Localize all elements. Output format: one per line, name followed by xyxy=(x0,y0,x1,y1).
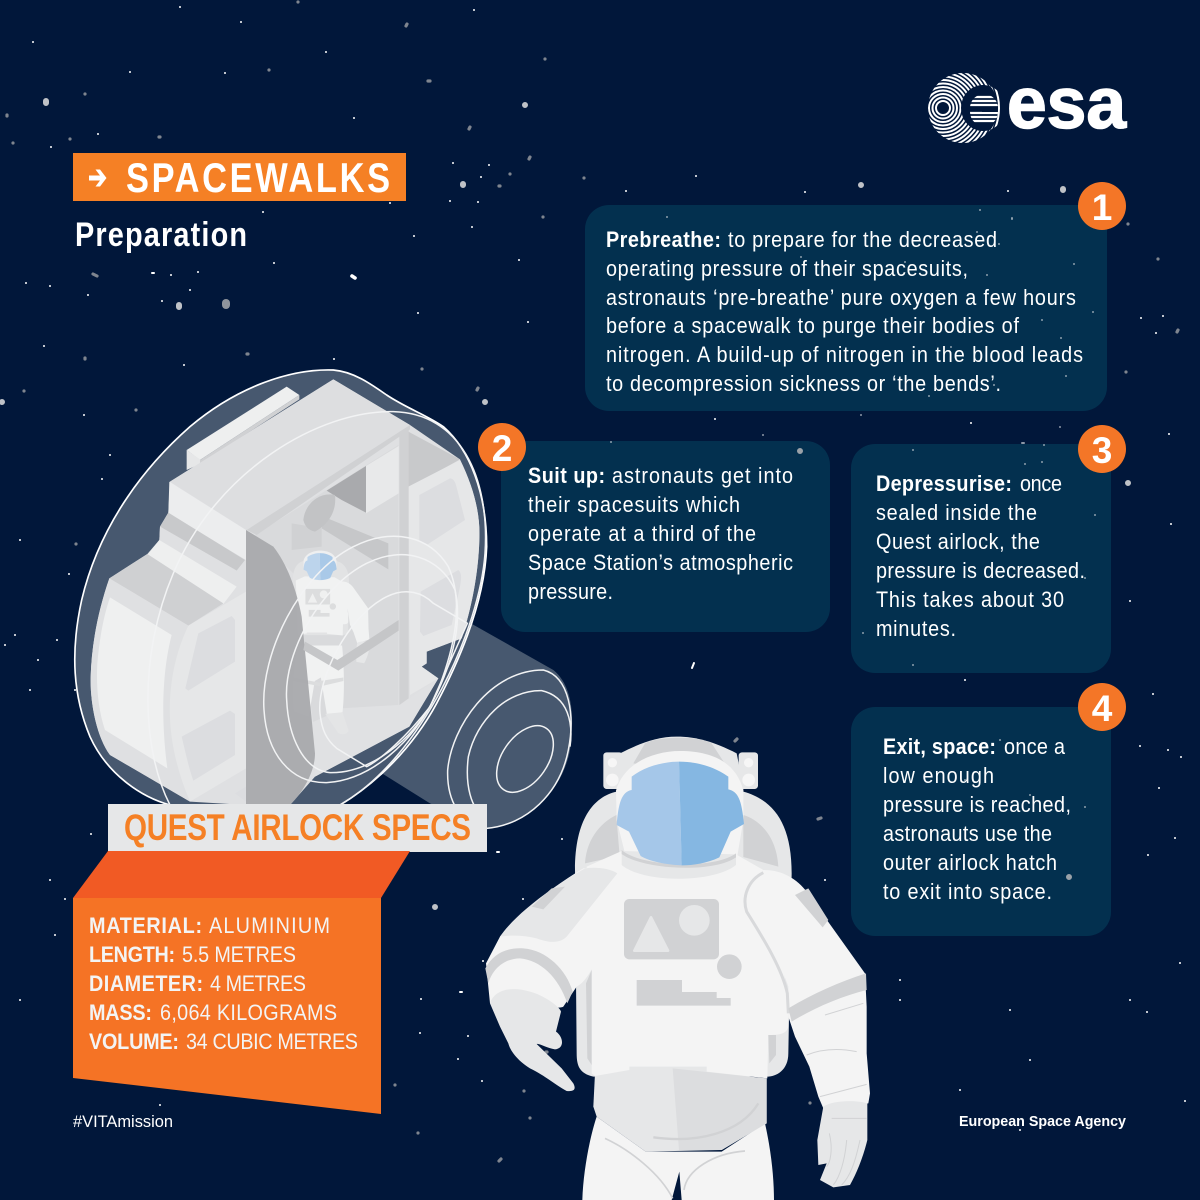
panel 3 text xyxy=(876,472,1085,641)
badge 1: 1 xyxy=(1092,187,1112,228)
badge 1 xyxy=(1078,182,1126,230)
heading: quest airlock specs: QUEST AIRLOCK SPECS xyxy=(124,808,471,849)
panel 1 text: before a spacewalk to purge their bodies of xyxy=(606,314,1019,338)
badge 2 xyxy=(478,423,526,471)
panel 4: exit xyxy=(851,683,1126,936)
torso xyxy=(587,851,788,1078)
translucent hull xyxy=(75,370,487,805)
panel 4 text: Exit, space: xyxy=(883,735,996,759)
panel 4 text: pressure is reached, xyxy=(883,793,1071,817)
helmet lamps xyxy=(603,752,758,789)
panel 1 text: operating pressure of their spacesuits, xyxy=(606,257,968,281)
specs list: 6,064 KILOGRAMS xyxy=(160,1001,337,1025)
visor xyxy=(617,762,744,865)
panel 1 text xyxy=(606,228,1083,396)
specs panel xyxy=(73,898,381,1114)
specs list: 5.5 METRES xyxy=(182,943,296,967)
waist xyxy=(593,1073,767,1152)
panel 1 text: Prebreathe: xyxy=(606,228,721,252)
arm: viewer right xyxy=(744,870,870,1187)
panel 4 text: low enough xyxy=(883,764,994,788)
panel 3 text: pressure is decreased. xyxy=(876,559,1085,583)
specs list: MATERIAL: xyxy=(89,914,202,938)
icon: esa striped globe xyxy=(928,73,1000,143)
panel 4 text: once a xyxy=(1004,735,1065,759)
panel 2 text: pressure. xyxy=(528,580,613,604)
specs panel top face xyxy=(73,851,410,898)
specs list: 34 CUBIC METRES xyxy=(186,1030,358,1054)
cylinder module xyxy=(377,598,572,828)
panel 4 text: astronauts use the xyxy=(883,822,1052,846)
panel 4 text: to exit into space. xyxy=(883,880,1052,904)
specs list: MASS: xyxy=(89,1001,152,1025)
specs list: DIAMETER: xyxy=(89,972,203,996)
badge 2: 2 xyxy=(492,428,512,469)
panel 2: suit up xyxy=(478,423,830,632)
panel 3: depressurise xyxy=(851,425,1126,673)
helmet xyxy=(617,737,743,860)
panel 1: prebreathe xyxy=(585,182,1126,411)
logo: esa xyxy=(928,73,1128,143)
panel 4 text xyxy=(883,735,1071,904)
panel 3 text: minutes. xyxy=(876,617,956,641)
panel 1 text: to decompression sickness or ‘the bends’. xyxy=(606,372,1001,396)
panel 3 text: Quest airlock, the xyxy=(876,530,1040,554)
backpack xyxy=(575,792,792,1077)
panel 4 text: outer airlock hatch xyxy=(883,851,1057,875)
hashtag: #VITAmission xyxy=(73,1112,173,1131)
arm: viewer left xyxy=(485,868,617,1091)
wordmark: esa xyxy=(1007,64,1127,144)
badge 4: 4 xyxy=(1092,688,1113,729)
specs list xyxy=(89,914,358,1054)
panel 1 text: nitrogen. A build-up of nitrogen in the blood leads xyxy=(606,343,1083,367)
panel 1 text: to prepare for the decreased xyxy=(728,228,997,252)
credit: European Space Agency xyxy=(959,1113,1127,1130)
panel 2 text xyxy=(528,464,793,604)
panel 1 text: astronauts ‘pre-breathe’ pure oxygen a few hours xyxy=(606,286,1076,310)
panel 3 text: This takes about 30 xyxy=(876,588,1064,612)
panel 2 text: Suit up: xyxy=(528,464,605,488)
panel 3 text: once xyxy=(1020,472,1062,496)
stars over panels xyxy=(611,210,1095,807)
badge 3 xyxy=(1078,425,1126,473)
large stars over panels xyxy=(800,451,1069,877)
large astronaut xyxy=(485,737,870,1200)
panel 2 text: their spacesuits which xyxy=(528,493,740,517)
panel 2 text: Space Station’s atmospheric xyxy=(528,551,793,575)
badge 3: 3 xyxy=(1092,430,1112,471)
small astronaut xyxy=(293,551,369,734)
subtitle: Preparation xyxy=(75,215,247,254)
panel 2 text: operate at a third of the xyxy=(528,522,756,546)
badge 4 xyxy=(1078,683,1126,731)
door frame and rail xyxy=(235,530,399,805)
specs list: VOLUME: xyxy=(89,1030,179,1054)
white outline rings xyxy=(148,412,571,828)
specs list: 4 METRES xyxy=(210,972,306,996)
title text: SPACEWALKS xyxy=(126,155,390,202)
specs list: ALUMINIUM xyxy=(209,914,330,938)
panel 3 text: sealed inside the xyxy=(876,501,1037,525)
title banner xyxy=(73,153,406,202)
panel 2 text: astronauts get into xyxy=(612,464,793,488)
interior structure xyxy=(91,379,479,805)
icon: arrow xyxy=(89,170,106,186)
left leg and right leg xyxy=(582,1117,774,1200)
panel 3 text: Depressurise: xyxy=(876,472,1012,496)
chest pack xyxy=(624,899,742,1006)
specs list: LENGTH: xyxy=(89,943,175,967)
airlock illustration xyxy=(75,370,572,828)
